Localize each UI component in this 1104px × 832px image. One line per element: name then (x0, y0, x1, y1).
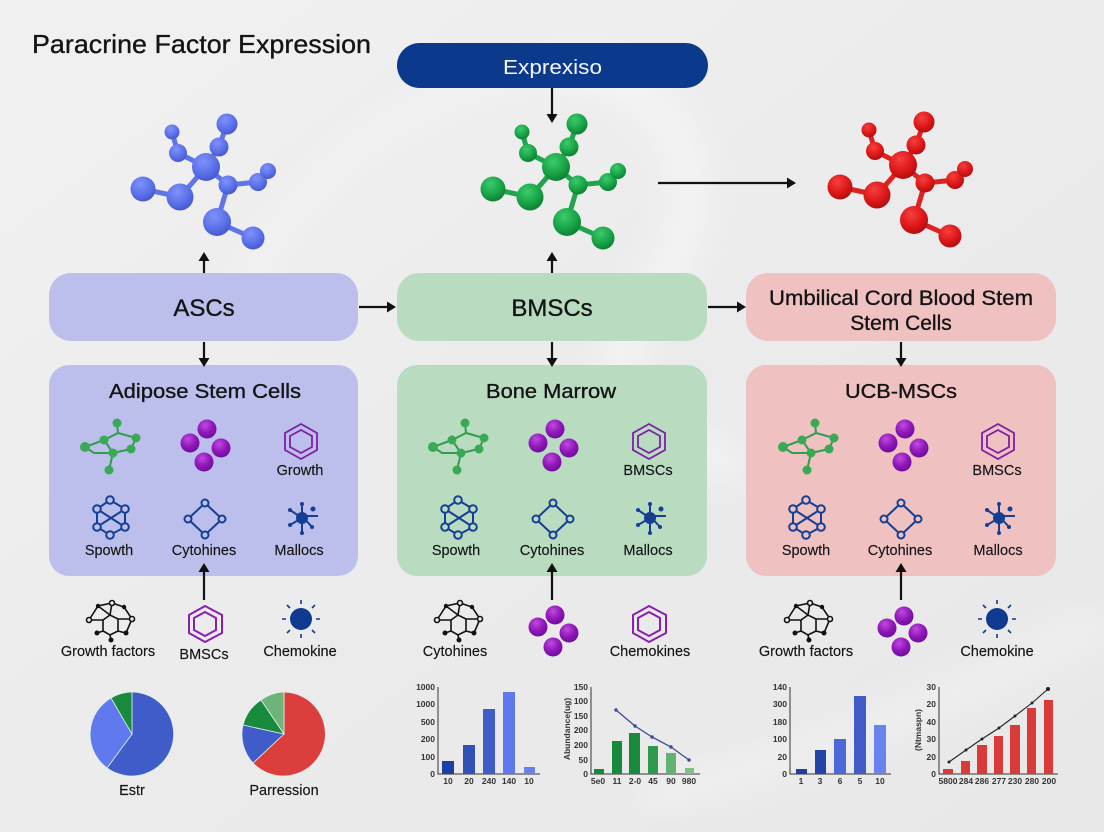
labels row: Cytohines (868, 543, 932, 559)
label box: BMSCs: BMSCs (511, 295, 593, 322)
labels row (85, 543, 324, 559)
icon: star node (288, 502, 318, 535)
bar and line chart: UCB red: 277 (992, 776, 1006, 786)
arrows (198, 88, 906, 600)
bar and line chart: UCB red (913, 682, 1058, 786)
bar chart: UCB blue (773, 682, 891, 786)
label: Growth factors: Growth factors (759, 644, 853, 660)
icon: purple spheres (528, 606, 578, 656)
icon: blue net (789, 496, 825, 539)
icon: green molecule (480, 114, 626, 250)
bar and line chart: Bone Marrow green: 0 (583, 769, 588, 779)
header pill: Exprexiso (503, 57, 602, 79)
bar and line chart: Bone Marrow green: Abundance(ug) (562, 698, 572, 760)
icon: black network, growth factors (86, 600, 134, 642)
icon: red molecule (828, 112, 973, 248)
label: Estr: Estr (119, 783, 145, 799)
bar chart: UCB blue: 300 (773, 699, 787, 709)
bar and line chart: Bone Marrow green: 90 (666, 776, 676, 786)
icon: black network, cytokines (434, 600, 482, 642)
bar chart: UCB blue: 100 (773, 734, 787, 744)
bar and line chart: UCB red: 30 (927, 734, 936, 744)
bar chart: UCB blue: 0 (782, 769, 787, 779)
bar and line chart: Bone Marrow green: 11 (612, 776, 622, 786)
bar chart: UCB blue: 10 (875, 776, 885, 786)
labels row (432, 543, 673, 559)
icon: hexagon (189, 606, 222, 642)
bar chart: Bone Marrow blue: 0 (430, 769, 435, 779)
pie chart: Estr (90, 692, 174, 776)
icon: diamond (880, 500, 922, 538)
icon: blue net (93, 496, 129, 539)
labels row (782, 543, 1023, 559)
labels row: Cytohines (520, 543, 584, 559)
label box: BMSCs (397, 273, 707, 341)
label: BMSCs: BMSCs (179, 647, 229, 663)
bar and line chart: Bone Marrow green (562, 682, 700, 786)
bar chart: UCB blue: 20 (778, 752, 787, 762)
label box: ASCs (49, 273, 358, 341)
panel: UCB-MSCs (746, 365, 1056, 576)
bar chart: Bone Marrow blue (416, 682, 540, 786)
bar chart: Bone Marrow blue: 100 (421, 752, 435, 762)
labels row: Spowth (782, 543, 830, 559)
bar and line chart: UCB red: 20 (927, 752, 936, 762)
bar and line chart: UCB red: 0 (931, 769, 936, 779)
panel: Adipose Stem Cells (49, 365, 358, 576)
icon: diamond (184, 500, 226, 538)
bar and line chart: Bone Marrow green: 150 (574, 711, 588, 721)
icon: purple spheres (180, 420, 230, 472)
icon: chemokine sun (282, 600, 320, 638)
bar chart: UCB blue: 5 (858, 776, 863, 786)
labels row: Mallocs (623, 543, 673, 559)
label: Growth: Growth (277, 463, 323, 479)
icon: hexagon (633, 424, 665, 459)
bar and line chart: UCB red: 284 (959, 776, 973, 786)
label: Chemokine: Chemokine (960, 644, 1034, 660)
label box: Umbilical Cord Blood Stem Cells: Umbilical Cord Blood Stem (769, 287, 1033, 310)
icon: purple spheres (878, 420, 928, 472)
labels row: Spowth (432, 543, 480, 559)
label: BMSCs: BMSCs (623, 463, 673, 479)
icon: green network (778, 418, 838, 474)
bar chart: UCB blue: 140 (773, 682, 787, 692)
label: BMSCs: BMSCs (972, 463, 1022, 479)
bar chart: Bone Marrow blue: 240 (482, 776, 496, 786)
bar and line chart: Bone Marrow green: 150 (574, 682, 588, 692)
bar chart: Bone Marrow blue: 10 (443, 776, 453, 786)
icon: purple spheres (528, 420, 578, 472)
panel: Bone Marrow: Bone Marrow (486, 381, 617, 403)
bar chart: Bone Marrow blue: 1000 (416, 699, 435, 709)
bar and line chart: Bone Marrow green: 2-0 (629, 776, 641, 786)
title: Paracrine Factor Expression (32, 29, 371, 59)
bar chart: UCB blue: 180 (773, 717, 787, 727)
icon: hexagon (285, 424, 317, 459)
bar chart: UCB blue: 3 (818, 776, 823, 786)
label: Chemokines: Chemokines (610, 644, 690, 660)
bar and line chart: Bone Marrow green: 50 (579, 755, 588, 765)
icon: blue net (441, 496, 477, 539)
bar and line chart: UCB red: (Ntmaspn) (913, 709, 923, 751)
bar and line chart: UCB red: 200 (1042, 776, 1056, 786)
icon: diamond (532, 500, 574, 538)
bar and line chart: Bone Marrow green: 100 (574, 696, 588, 706)
labels row: Cytohines (172, 543, 236, 559)
bar and line chart: Bone Marrow green: 5e0 (591, 776, 605, 786)
bar chart: Bone Marrow blue: 20 (464, 776, 474, 786)
icon: hexagon (982, 424, 1014, 459)
bar and line chart: Bone Marrow green: 45 (648, 776, 658, 786)
icon: star node (636, 502, 666, 535)
label: Chemokine: Chemokine (263, 644, 337, 660)
icon: black network, growth factors (784, 600, 832, 642)
panel: UCB-MSCs: UCB-MSCs (845, 381, 957, 403)
label box: Umbilical Cord Blood Stem Cells (746, 273, 1056, 341)
icon: green network (428, 418, 488, 474)
bar chart: Bone Marrow blue: 10 (524, 776, 534, 786)
bar chart: Bone Marrow blue: 1000 (416, 682, 435, 692)
icon: chemokine sun (978, 600, 1016, 638)
icon: hexagon (633, 606, 666, 642)
bar and line chart: UCB red: 5800 (939, 776, 958, 786)
bar chart: Bone Marrow blue: 500 (421, 717, 435, 727)
icon: green network (80, 418, 140, 474)
bar and line chart: UCB red: 280 (1025, 776, 1039, 786)
labels row: Mallocs (274, 543, 324, 559)
bar and line chart: Bone Marrow green: 200 (574, 740, 588, 750)
bar and line chart: UCB red: 20 (927, 699, 936, 709)
bar chart: UCB blue: 6 (838, 776, 843, 786)
header pill (397, 43, 708, 88)
bar and line chart: Bone Marrow green: 200 (574, 725, 588, 735)
bar and line chart: UCB red: 30 (927, 682, 936, 692)
label: Growth factors: Growth factors (61, 644, 155, 660)
bar and line chart: UCB red: 230 (1008, 776, 1022, 786)
labels row: Mallocs (973, 543, 1023, 559)
label: Cytohines: Cytohines (423, 644, 487, 660)
label box: Umbilical Cord Blood Stem Cells: Stem Cells (850, 312, 952, 335)
label box: ASCs: ASCs (173, 295, 235, 322)
label: Parression: Parression (249, 783, 319, 799)
icon: purple spheres (878, 606, 928, 656)
bar and line chart: UCB red: 40 (927, 717, 936, 727)
bar chart: UCB blue: 1 (799, 776, 804, 786)
icon: blue molecule (130, 114, 276, 250)
pie chart: Parression (242, 692, 325, 776)
bar chart: Bone Marrow blue: 200 (421, 734, 435, 744)
icon: star node (985, 502, 1015, 535)
bar and line chart: UCB red: 286 (975, 776, 989, 786)
panel: Adipose Stem Cells: Adipose Stem Cells (109, 381, 301, 403)
labels row: Spowth (85, 543, 133, 559)
panel: Bone Marrow (397, 365, 707, 576)
bar and line chart: Bone Marrow green: 980 (682, 776, 696, 786)
bar chart: Bone Marrow blue: 140 (502, 776, 516, 786)
